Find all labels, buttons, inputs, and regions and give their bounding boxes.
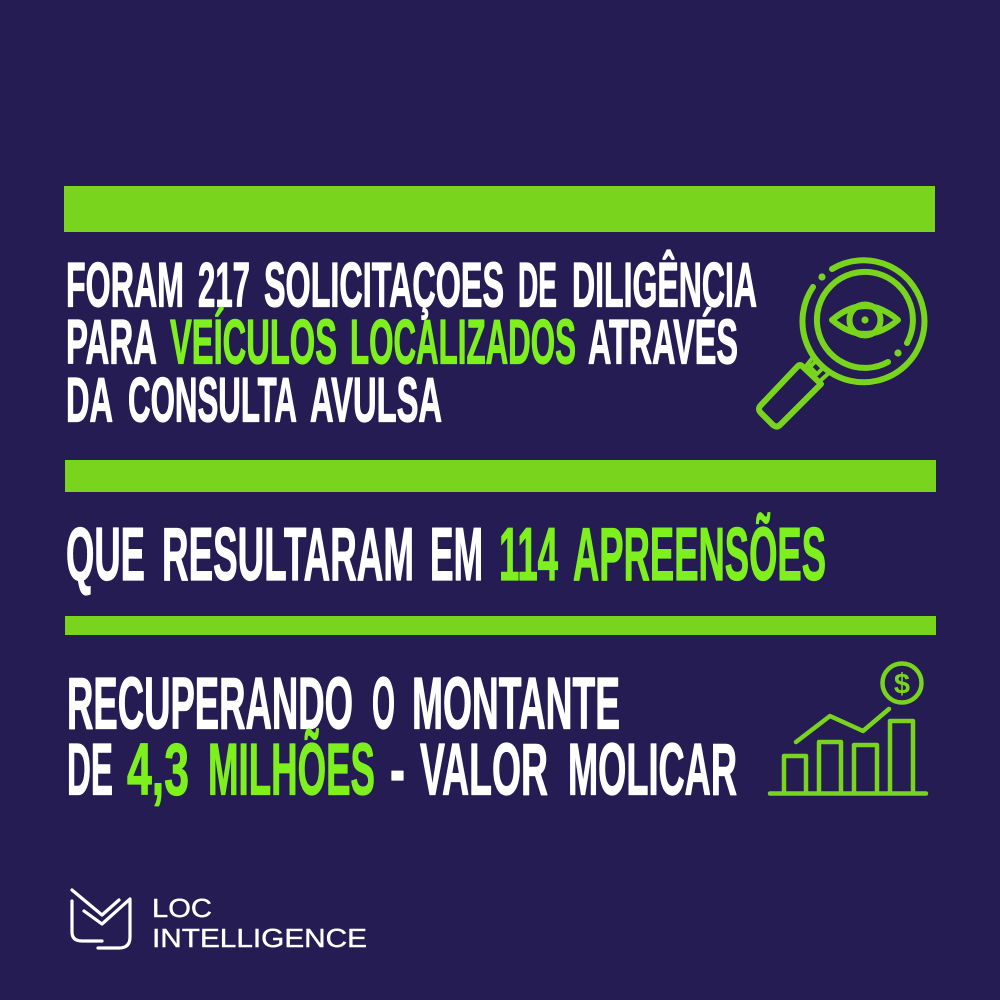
text block: recovered amount: -	[390, 730, 405, 810]
text block: recovered amount: MONTANTE	[412, 664, 620, 744]
text block: seizures: QUE	[66, 512, 145, 596]
text block: diligence requests: FORAM	[66, 250, 184, 320]
text block: recovered amount: 4,3	[127, 730, 189, 810]
text block: diligence requests: DE	[518, 250, 557, 320]
text block: recovered amount: MILHÕES	[208, 730, 375, 810]
lens inner ring	[817, 272, 913, 368]
text block: diligence requests: DILIGÊNCIA	[572, 250, 757, 320]
text block: recovered amount: RECUPERANDO	[67, 664, 353, 744]
text block: seizures: EM	[430, 512, 483, 596]
handle	[806, 356, 830, 381]
text: MOLICAR	[568, 730, 737, 810]
text block: diligence requests: AVULSA	[310, 366, 442, 436]
top green bar	[64, 186, 935, 232]
text block: diligence requests: DA	[66, 366, 113, 436]
text block: seizures	[66, 512, 826, 596]
eye	[832, 306, 898, 334]
text block: diligence requests: PARA	[66, 308, 157, 378]
lens outer ring	[802, 260, 924, 382]
text block: diligence requests: CONSULTA	[128, 366, 297, 436]
text block: seizures: 114	[499, 512, 558, 596]
text block: diligence requests: ATRAVÉS	[588, 308, 738, 378]
logo text: LOC	[152, 893, 212, 923]
logo text: INTELLIGENCE	[152, 923, 367, 953]
logo: Loc Intelligence	[72, 890, 367, 953]
text block: diligence requests: SOLICITAÇOES	[264, 250, 504, 320]
text block: seizures: RESULTARAM	[162, 512, 414, 596]
text block: diligence requests: LOCALIZADOS	[350, 308, 576, 378]
text block: recovered amount: O	[372, 664, 395, 744]
text block: recovered amount	[67, 664, 737, 810]
text block: diligence requests	[66, 250, 757, 436]
logo mark	[72, 890, 130, 948]
text block: diligence requests: VEÍCULOS	[170, 308, 337, 378]
icon: magnifying glass with eye	[759, 260, 924, 426]
text block: recovered amount: DE	[67, 730, 113, 810]
middle green bar	[65, 460, 936, 492]
icon: rising bar chart with dollar coin: $	[894, 668, 910, 700]
icon: rising bar chart with dollar coin	[770, 664, 926, 794]
text block: diligence requests: 217	[198, 250, 250, 320]
logo text	[152, 893, 367, 953]
lower green bar	[65, 616, 936, 635]
text block: recovered amount: VALOR	[420, 730, 548, 810]
